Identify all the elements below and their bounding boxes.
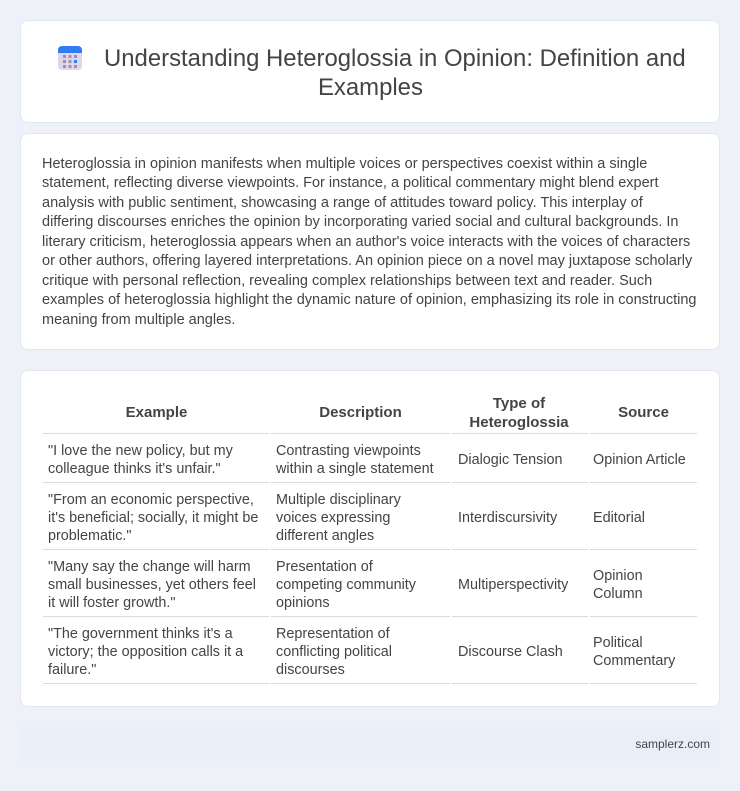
row 3: Presentation of	[276, 559, 373, 575]
header: Type of Heteroglossia: Heteroglossia	[469, 414, 569, 430]
intro text: literary criticism, heteroglossia appears when an author's voice interacts with the voices of characters	[42, 234, 690, 250]
intro text: critique with personal reflection, revealing complex relationships between text and reader. Such	[42, 273, 652, 289]
row 1	[48, 443, 686, 477]
row 1: "I love the new policy, but my	[48, 443, 233, 459]
row 2: problematic."	[48, 528, 132, 544]
panel: table	[20, 370, 720, 707]
row 1: colleague thinks it's unfair."	[48, 461, 221, 477]
row 4: Discourse Clash	[458, 644, 563, 660]
row 2: it's beneficial; socially, it might be	[48, 510, 258, 526]
title: Understanding Heteroglossia in Opinion: Definition and	[104, 45, 686, 72]
intro text: analysis with public sentiment, showcasing a range of attitudes toward policy. This interplay of	[42, 195, 643, 211]
header: Type of Heteroglossia	[469, 395, 569, 430]
row 4: discourses	[276, 662, 345, 678]
row 1: Dialogic Tension	[458, 452, 563, 468]
row 3: it will foster growth."	[48, 595, 175, 611]
row 2: different angles	[276, 528, 374, 544]
row 2: Interdiscursivity	[458, 510, 557, 526]
row 1: within a single statement	[276, 461, 434, 477]
row 4: Commentary	[593, 653, 675, 669]
intro text: statement, reflecting diverse viewpoints. For instance, a political commentary might blend expert	[42, 175, 659, 191]
row 3: Column	[593, 586, 643, 602]
row 2: Multiple disciplinary	[276, 492, 401, 508]
row 4: conflicting political	[276, 644, 392, 660]
row 4: failure."	[48, 662, 96, 678]
row 2: Editorial	[593, 510, 645, 526]
header panel	[20, 20, 720, 123]
row 3: competing community	[276, 577, 416, 593]
row 3: Opinion	[593, 568, 643, 584]
row 2	[48, 492, 645, 544]
header: Type of Heteroglossia: Type of	[493, 395, 545, 412]
title: Examples	[318, 74, 423, 101]
row 2: "From an economic perspective,	[48, 492, 254, 508]
row 4: "The government thinks it's a	[48, 626, 233, 642]
row 4: Political	[593, 635, 643, 651]
footer bar	[20, 727, 720, 761]
row 3: small businesses, yet others feel	[48, 577, 256, 593]
row 3: "Many say the change will harm	[48, 559, 251, 575]
header: Source: Source	[618, 404, 669, 421]
header: Example: Example	[126, 404, 187, 421]
row 3	[48, 559, 643, 611]
header: Description: Description	[319, 404, 402, 421]
intro text: examples of heteroglossia highlight the dynamic nature of opinion, emphasizing its role in constructing	[42, 292, 696, 308]
row 4: victory; the opposition calls it a	[48, 644, 243, 660]
panel: intro paragraph	[20, 133, 720, 350]
row 2: voices expressing	[276, 510, 390, 526]
row 3: Multiperspectivity	[458, 577, 568, 593]
icon: calendar	[58, 46, 82, 70]
row 1: Opinion Article	[593, 452, 686, 468]
title	[104, 45, 686, 101]
row 1: Contrasting viewpoints	[276, 443, 421, 459]
intro text: Heteroglossia in opinion manifests when multiple voices or perspectives coexist within a single	[42, 156, 647, 172]
row 3: opinions	[276, 595, 330, 611]
row 4: Representation of	[276, 626, 390, 642]
row 4	[48, 626, 676, 678]
intro text: meaning from multiple angles.	[42, 312, 235, 328]
intro text: or other authors, offering layered interpretations. An opinion piece on a novel may juxtapose scholarly	[42, 253, 692, 269]
table	[43, 395, 697, 684]
intro text	[42, 156, 696, 328]
footer text: samplerz.com	[635, 737, 710, 751]
intro text: differing discourses enriches the opinion by incorporating varied social and cultural backgrounds. In	[42, 214, 678, 230]
